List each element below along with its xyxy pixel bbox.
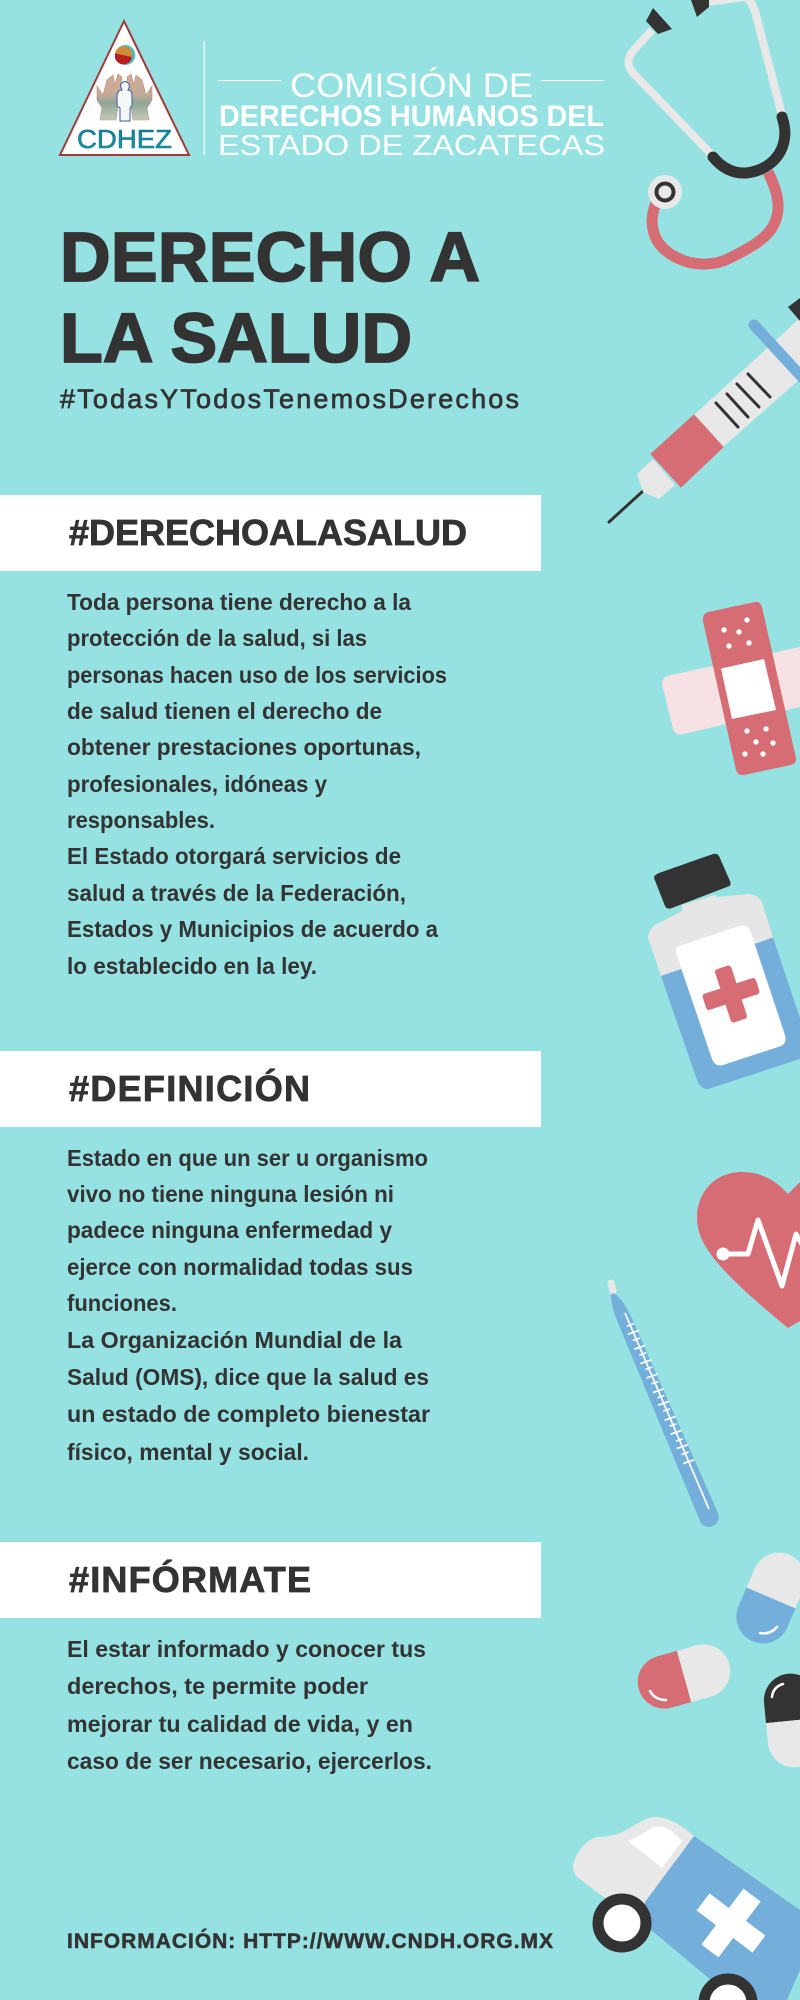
header organisation name: DERECHOS HUMANOS DEL xyxy=(219,100,604,133)
heading band: #DERECHOALASALUD xyxy=(69,512,467,553)
title: DERECHO A xyxy=(60,218,480,296)
body text xyxy=(67,1636,432,1774)
icon: stethoscope xyxy=(628,0,785,264)
body text: obtener prestaciones oportunas, xyxy=(67,734,421,760)
body text xyxy=(67,589,447,979)
icon: thermometer xyxy=(611,1283,719,1527)
title xyxy=(60,218,480,377)
panel: definición xyxy=(0,1051,541,1465)
icon: dark capsule xyxy=(761,1671,800,1770)
icon: blue capsule xyxy=(728,1544,800,1652)
body text: Toda persona tiene derecho a la xyxy=(67,589,411,615)
body text: mejorar tu calidad de vida, y en xyxy=(67,1711,413,1737)
body text: Estados y Municipios de acuerdo a xyxy=(67,916,438,942)
panel: derecho a la salud xyxy=(0,495,541,979)
header logo: CDHEZ triangle xyxy=(60,21,189,155)
heading band: #DEFINICIÓN xyxy=(69,1067,310,1109)
heading band: #INFÓRMATE xyxy=(69,1558,311,1600)
title: LA SALUD xyxy=(60,299,412,377)
footer information link: INFORMACIÓN: HTTP://WWW.CNDH.ORG.MX xyxy=(67,1929,553,1953)
header logo: CDHEZ triangle: CDHEZ xyxy=(77,124,172,154)
body text: un estado de completo bienestar xyxy=(67,1401,430,1427)
body text: El estar informado y conocer tus xyxy=(67,1636,426,1662)
body text: funciones. xyxy=(67,1290,177,1316)
panel: infórmate xyxy=(0,1542,541,1774)
body text: vivo no tiene ninguna lesión ni xyxy=(67,1181,394,1207)
body text: personas hacen uso de los servicios xyxy=(67,662,447,688)
heading band xyxy=(0,1542,541,1618)
header organisation name: COMISIÓN DE xyxy=(290,67,533,105)
body text: ejerce con normalidad todas sus xyxy=(67,1254,413,1280)
body text: profesionales, idóneas y xyxy=(67,771,327,797)
body text: caso de ser necesario, ejercerlos. xyxy=(67,1748,432,1774)
body text: responsables. xyxy=(67,807,215,833)
body text: padece ninguna enfermedad y xyxy=(67,1217,392,1243)
body text: protección de la salud, si las xyxy=(67,625,367,651)
body text: El Estado otorgará servicios de xyxy=(67,843,401,869)
heading band xyxy=(0,1051,541,1127)
icon: medicine bottle xyxy=(648,854,800,1089)
body text: Salud (OMS), dice que la salud es xyxy=(67,1364,429,1390)
body text: lo establecido en la ley. xyxy=(67,953,317,979)
body text: salud a través de la Federación, xyxy=(67,880,406,906)
heading band xyxy=(0,495,541,571)
body text: Estado en que un ser u organismo xyxy=(67,1145,428,1171)
header organisation name xyxy=(204,41,605,162)
body text xyxy=(67,1145,430,1465)
icon: heart with pulse xyxy=(697,1172,800,1328)
icon: syringe xyxy=(609,298,800,522)
icon: ambulance xyxy=(573,1817,800,2000)
body text: de salud tienen el derecho de xyxy=(67,698,382,724)
icon: red capsule xyxy=(632,1638,736,1715)
hashtag subtitle: #TodasYTodosTenemosDerechos xyxy=(60,384,519,414)
body text: físico, mental y social. xyxy=(67,1439,309,1465)
icon: bandage xyxy=(662,602,800,775)
header organisation name: ESTADO DE ZACATECAS xyxy=(218,130,605,162)
body text: derechos, te permite poder xyxy=(67,1673,368,1699)
body text: La Organización Mundial de la xyxy=(67,1327,402,1353)
